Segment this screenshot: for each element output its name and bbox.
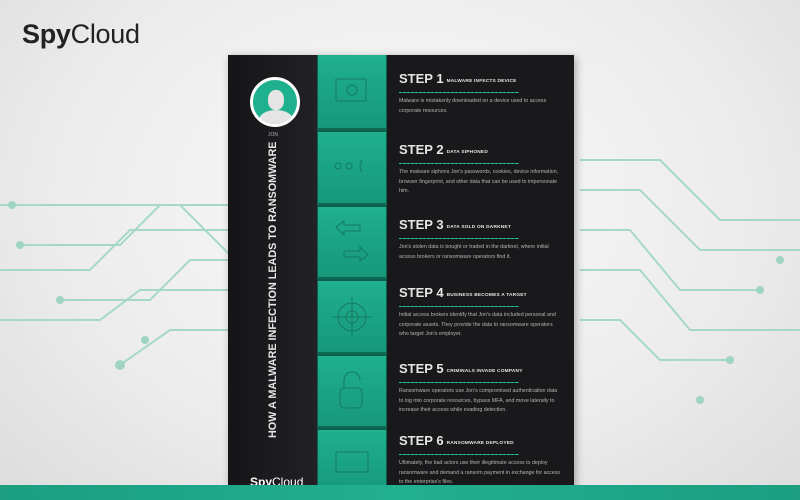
step 2: The malware siphons Jon's passwords, cookies, device information, browser fingerprint, and other data that can be used to impersonate him. (399, 169, 558, 194)
step 3 (399, 217, 549, 260)
tile 1 (318, 55, 386, 130)
step 6: Ultimately, the bad actors use their illegitimate access to deploy ransomware and demand a ransom payment in exchange for access to the enterprise's files. (399, 460, 560, 485)
step 1: Malware is mistakenly downloaded on a device used to access corporate resources. (399, 98, 546, 114)
logo: SpyCloud: SpyCloud (22, 19, 140, 49)
tile 5 (318, 356, 386, 428)
left column (228, 55, 318, 495)
document (228, 55, 574, 495)
teal column (317, 55, 387, 495)
name: JON (268, 132, 278, 138)
step 6 (399, 433, 560, 485)
avatar: Jon (250, 77, 300, 127)
tile 4 (318, 281, 386, 354)
step 4: STEP 4 BUSINESS BECOMES A TARGET (399, 285, 527, 300)
step 4: Initial access brokers identify that Jon's data included personal and corporate assets. They provide the data to ransomware operators who target Jon's employer. (399, 312, 556, 337)
step 1: STEP 1 MALWARE INFECTS DEVICE (399, 71, 517, 86)
step 5: Ransomware operators use Jon's compromised authentication data to log into corporate resources, bypass MFA, and move laterally to increase their access while evading detection. (399, 388, 557, 413)
tile 2 (318, 132, 386, 205)
step 3: STEP 3 DATA SOLD ON DARKNET (399, 217, 511, 232)
tile 6 (318, 430, 386, 495)
step 6: STEP 6 RANSOMWARE DEPLOYED (399, 433, 514, 448)
step 2: STEP 2 DATA SIPHONED (399, 142, 488, 157)
vertical title: HOW A MALWARE INFECTION LEADS TO RANSOMWARE (267, 142, 279, 438)
step 2 (399, 142, 558, 194)
step 4 (399, 285, 556, 337)
tile 3 (318, 207, 386, 279)
step 1 (399, 71, 546, 114)
step 5 (399, 361, 558, 413)
step 3: Jon's stolen data is bought or traded in the darknet, where initial access brokers or ransomware operators find it. (399, 244, 549, 260)
bottom teal bar (0, 485, 800, 500)
bottom logo: SpyCloud (250, 475, 303, 489)
step 5: STEP 5 CRIMINALS INVADE COMPANY (399, 361, 523, 376)
